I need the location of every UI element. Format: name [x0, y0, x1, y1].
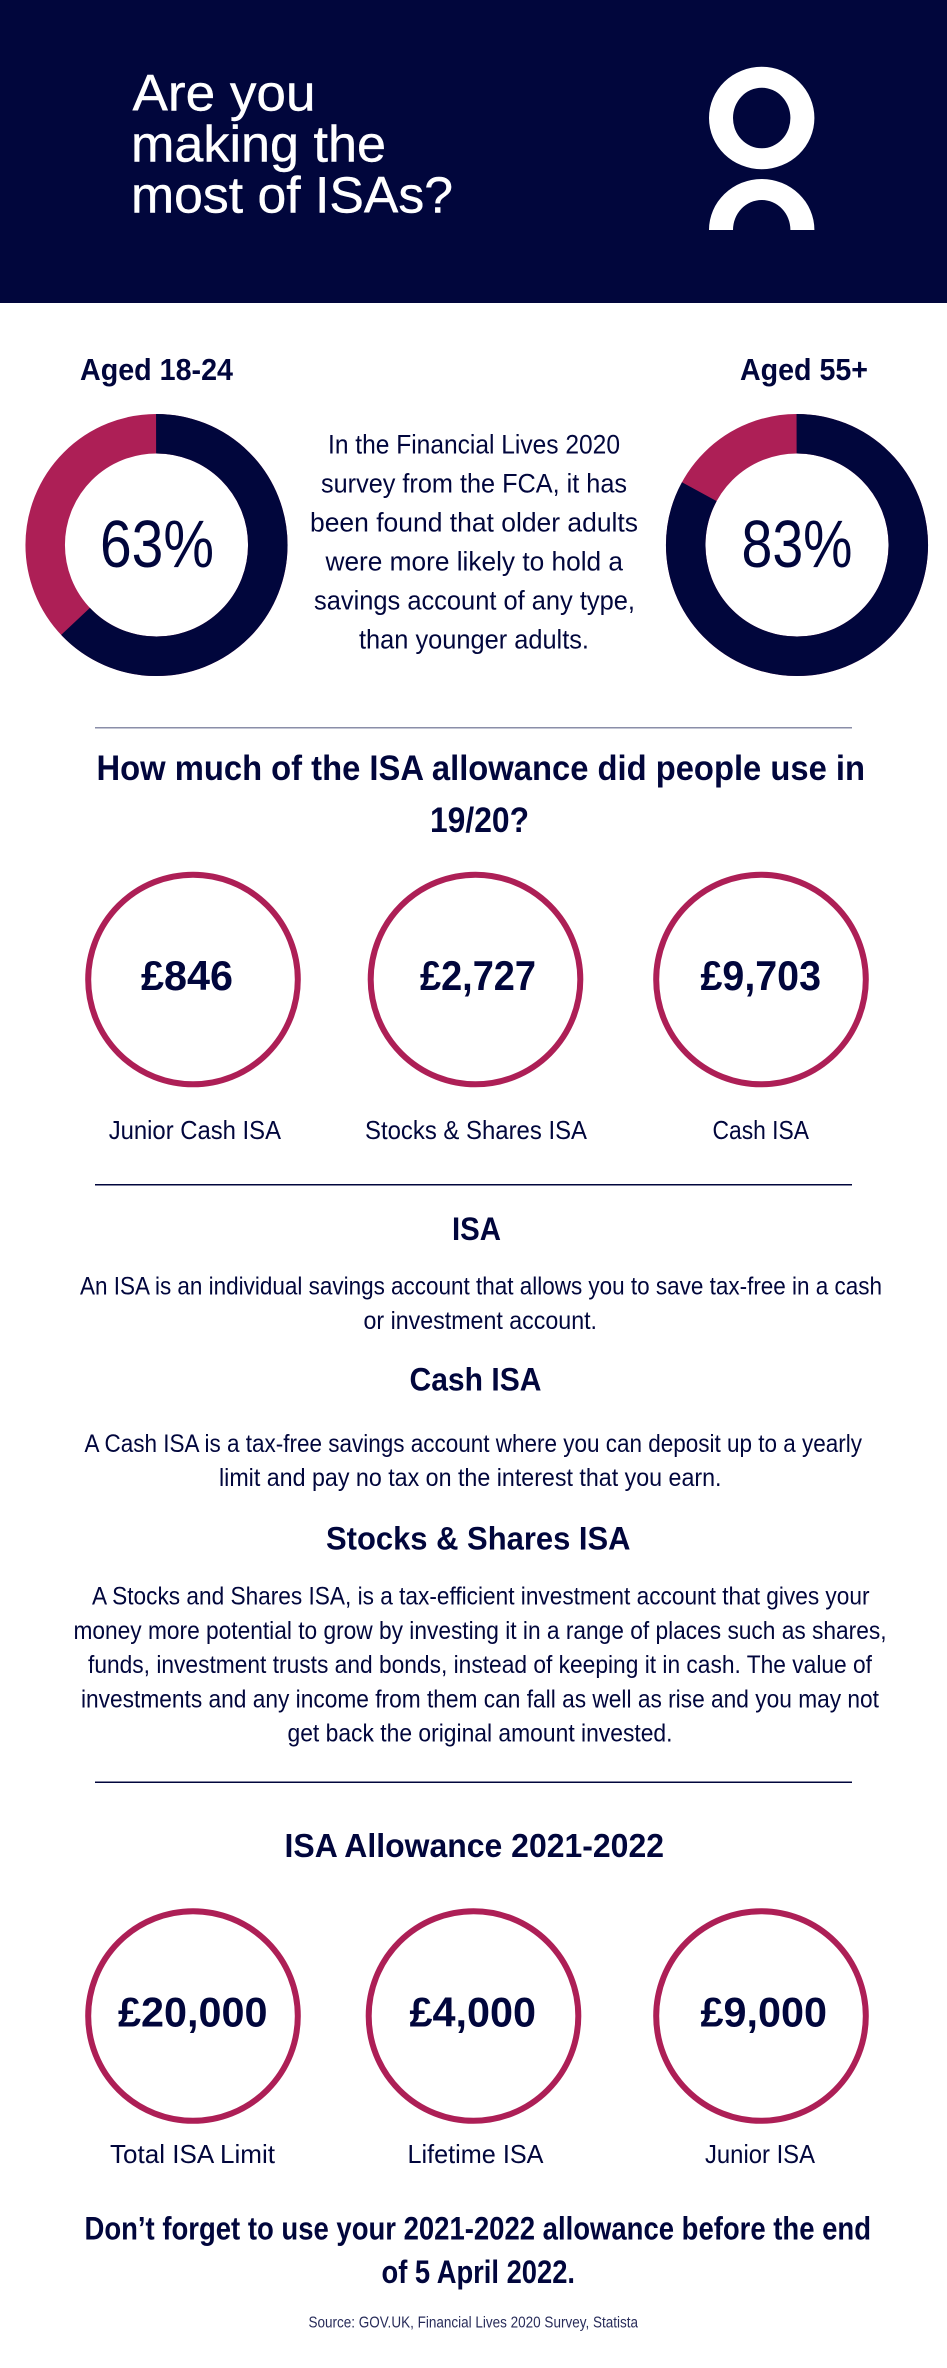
heading: stocks and shares ISA: Stocks & Shares ISA — [326, 1520, 630, 1556]
text block: cash ISA definition: limit and pay no tax on the interest that you earn. — [219, 1464, 722, 1492]
text block: survey summary: than younger adults. — [359, 624, 589, 654]
stat: cash ISA: £9,703 — [700, 952, 821, 999]
chart: donut 83% — [686, 434, 908, 656]
stat: cash ISA — [656, 875, 866, 1145]
text block: survey summary: survey from the FCA, it has — [321, 468, 627, 498]
chart: donut 83%: 83% — [742, 507, 852, 582]
heading: allowance used: 19/20? — [430, 801, 529, 840]
panel: header banner — [0, 0, 947, 303]
stat: cash ISA: Cash ISA — [712, 1115, 810, 1145]
stat: junior cash ISA — [88, 875, 298, 1145]
stat: total ISA limit: £20,000 — [118, 1988, 268, 2036]
text block: ISA definition: or investment account. — [364, 1307, 597, 1335]
chart: donut 63%: 63% — [100, 507, 214, 582]
stat: stocks and shares ISA — [365, 875, 588, 1145]
text block: stocks and shares ISA definition: money more potential to grow by investing it in a range of places such as shares, — [74, 1617, 886, 1645]
heading: aged 55+: Aged 55+ — [740, 352, 868, 387]
callout: allowance deadline — [84, 2210, 871, 2290]
text block: survey summary: In the Financial Lives 2020 — [328, 430, 620, 460]
chart: donut 63% — [45, 434, 268, 656]
text block: cash ISA definition: A Cash ISA is a tax-free savings account where you can deposit up to a yearly — [84, 1430, 862, 1458]
title — [131, 64, 453, 224]
text block: ISA definition — [80, 1272, 882, 1335]
stat: total ISA limit: Total ISA Limit — [110, 2139, 276, 2169]
heading: cash ISA: Cash ISA — [410, 1362, 542, 1398]
stat: junior ISA: Junior ISA — [705, 2139, 816, 2169]
text block: stocks and shares ISA definition: A Stocks and Shares ISA, is a tax-efficient investment account that gives your — [92, 1582, 870, 1610]
text block: ISA definition: An ISA is an individual savings account that allows you to save tax-free in a cash — [80, 1272, 882, 1300]
stat: junior ISA — [656, 1911, 866, 2169]
stat: lifetime ISA: £4,000 — [410, 1988, 536, 2036]
title: making the — [131, 116, 386, 172]
title: Are you — [132, 64, 316, 122]
heading: allowance 2021-2022: ISA Allowance 2021-2022 — [284, 1827, 664, 1864]
panel: ISA allowance used 19/20 — [88, 749, 866, 1145]
text block: survey summary: savings account of any type, — [314, 586, 635, 616]
stat: total ISA limit — [88, 1911, 298, 2169]
text block: stocks and shares ISA definition: funds, investment trusts and bonds, instead of keeping it in cash. The value of — [88, 1651, 872, 1679]
source note: Source: GOV.UK, Financial Lives 2020 Survey, Statista — [308, 2314, 638, 2332]
stat: junior ISA: £9,000 — [700, 1988, 827, 2036]
stat: stocks and shares ISA: Stocks & Shares ISA — [365, 1115, 588, 1145]
heading: ISA: ISA — [452, 1211, 501, 1247]
icon: logo ring and arch — [709, 67, 814, 230]
heading: allowance used — [96, 749, 865, 840]
stat: stocks and shares ISA: £2,727 — [420, 952, 536, 999]
callout: allowance deadline: of 5 April 2022. — [382, 2254, 575, 2290]
panel: ISA definitions — [74, 1211, 886, 1748]
text block: cash ISA definition — [84, 1430, 862, 1492]
text block: stocks and shares ISA definition: investments and any income from them can fall as well as rise and you may not — [81, 1686, 879, 1714]
text block: survey summary: been found that older adults — [310, 508, 638, 538]
stat: lifetime ISA: Lifetime ISA — [408, 2139, 544, 2169]
text block: survey summary — [310, 430, 638, 654]
heading: allowance used: How much of the ISA allowance did people use in — [96, 749, 865, 788]
stat: junior cash ISA: £846 — [141, 952, 233, 999]
panel: savings by age — [45, 352, 908, 656]
panel: ISA allowance 2021-2022 — [88, 1827, 866, 2169]
text block: stocks and shares ISA definition — [74, 1582, 886, 1748]
text block: stocks and shares ISA definition: get back the original amount invested. — [288, 1720, 672, 1748]
text block: survey summary: were more likely to hold a — [325, 546, 624, 576]
heading: aged 18-24: Aged 18-24 — [80, 352, 234, 387]
stat: junior cash ISA: Junior Cash ISA — [109, 1115, 282, 1145]
title: most of ISAs? — [131, 166, 453, 224]
stat: lifetime ISA — [369, 1911, 578, 2169]
